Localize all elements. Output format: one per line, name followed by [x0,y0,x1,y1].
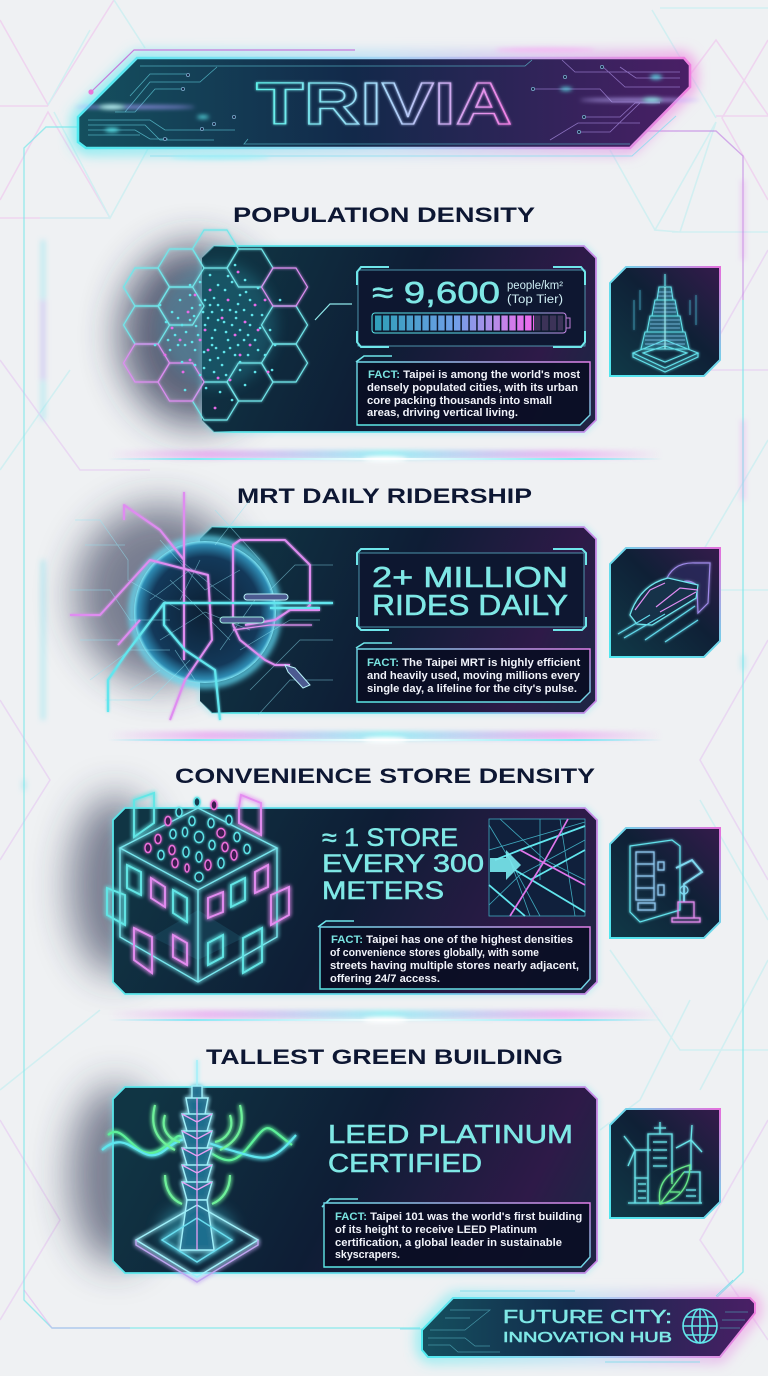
store cube illustration [107,793,289,982]
icon: metro train [610,548,720,657]
panel: population density [70,230,755,1362]
fact box: The Taipei MRT is highly efficient [399,657,580,669]
roof store markers [145,798,250,882]
certification label [328,1119,573,1178]
store frequency stat [322,824,484,905]
fact box: offering 24/7 access. [330,973,440,985]
hexagon population cluster [124,230,590,425]
certification label: CERTIFIED [328,1148,482,1178]
heading: convenience store density: CONVENIENCE STORE DENSITY [175,765,595,788]
fact box: areas, driving vertical living. [367,407,518,419]
divider glow [108,1010,663,1023]
fact box: FACT: [368,369,400,381]
green tower illustration [102,1060,296,1282]
energy waves [102,1105,296,1204]
heading: population density: POPULATION DENSITY [233,204,535,227]
fact box: skyscrapers. [335,1249,400,1261]
fact box: Taipei has one of the highest densities [363,934,573,946]
fact box [356,643,590,702]
icon: globe [683,1309,717,1343]
fact box: single day, a lifeline for the city's pulse. [367,683,577,695]
divider glow [108,731,663,743]
fact box: of convenience stores globally, with some [330,947,539,959]
store frequency stat: METERS [322,877,444,905]
ridership value: 2+ MILLION [372,562,568,594]
footer text: FUTURE CITY: [503,1307,672,1327]
density progress bar [372,309,570,337]
footer badge: INNOVATION HUB [503,1330,672,1346]
metro trains [220,594,310,688]
store frequency stat: ≈ 1 STORE [322,824,458,852]
certification label: LEED PLATINUM [328,1119,573,1149]
fact box: of its height to receive LEED Platinum [335,1224,537,1236]
divider glow [108,450,663,462]
fact box: densely populated cities, with its urban [367,382,578,394]
fact box: certification, a global leader in sustainable [335,1237,562,1249]
population value: ≈ 9,600 [372,275,500,310]
icon: skyscraper [610,267,720,376]
heading: MRT ridership: MRT DAILY RIDERSHIP [237,485,532,508]
icon: green city [610,1109,720,1218]
icon: vending machine and robot arm [610,828,720,938]
fact box: Taipei is among the world's most [400,369,580,381]
population tier: (Top Tier) [507,294,563,306]
ridership unit: RIDES DAILY [372,590,568,622]
fact box [322,1199,590,1267]
title banner [75,48,700,159]
frame glow accents [24,180,743,790]
banner light streaks [75,48,700,159]
fact box: core packing thousands into small [367,395,552,407]
heading: tallest green building: TALLEST GREEN BUILDING [206,1046,563,1069]
banner heading: TRIVIA [256,71,512,137]
population unit: people/km² [507,280,563,292]
fact box: streets having multiple stores nearly adjacent, [330,960,579,972]
fact box: FACT: [331,934,363,946]
street map [489,819,585,916]
stat box [357,549,586,630]
footer badge [400,1280,755,1362]
fact box: FACT: [335,1211,367,1223]
panel: convenience store density [70,793,597,994]
panel: MRT ridership [70,492,596,720]
fact box: Taipei 101 was the world's first building [367,1211,582,1223]
metro map globe [70,492,333,720]
store frequency stat: EVERY 300 [322,850,484,878]
stat box [357,267,585,347]
fact box: and heavily used, moving millions every [367,670,581,682]
banner circuit traces [88,60,680,144]
arrow to map [490,850,521,880]
fact box: FACT: [367,657,399,669]
panel: tallest green building [70,1060,597,1282]
fact box [318,921,590,989]
fact box [356,356,590,425]
